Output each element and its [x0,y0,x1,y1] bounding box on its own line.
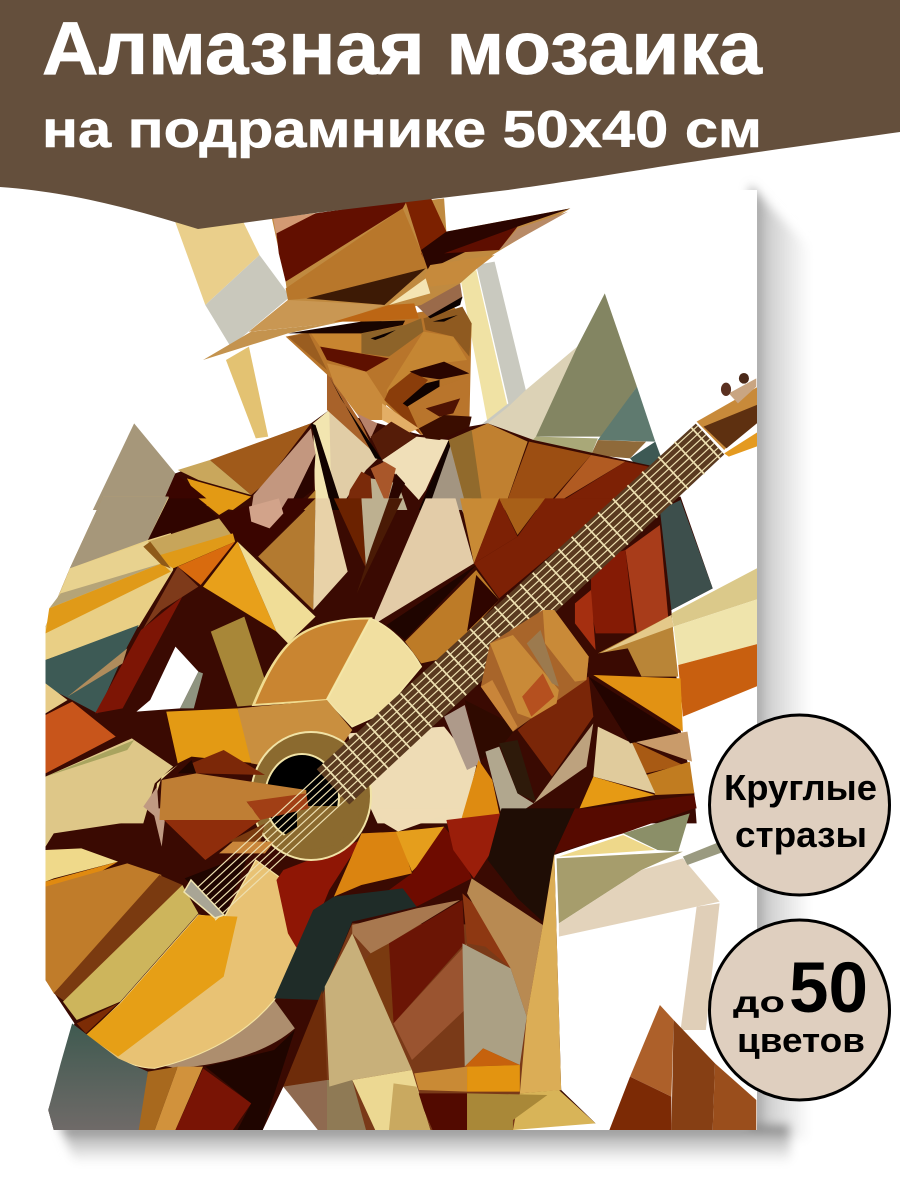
shirt and jacket upper [159,410,683,510]
badge: up to 50 colours: до [733,986,785,1019]
hat [203,197,570,360]
canvas shadow [60,185,810,1163]
right background shapes and lower corner triangle [557,813,756,1130]
badge: round rhinestones: Круглые [724,767,877,808]
guitar upper body [166,618,421,767]
painting: guitarist [45,190,761,1130]
badge: up to 50 colours [710,920,890,1100]
right hand fingers [481,610,589,732]
left hand [143,750,309,860]
torso, arms and left background stripes [46,497,760,823]
badge: up to 50 colours: 50 [789,949,868,1028]
guitar bridge [184,880,224,918]
lower guitar body and legs [46,808,694,1130]
title line 1: Алмазная мозаика [42,6,763,90]
face [286,283,472,460]
soundhole rosette [251,732,371,860]
badge: round rhinestones: стразы [735,814,867,855]
headstock [697,373,761,457]
title line 2: на подрамнике 50х40 см [42,101,762,159]
guitar neck with frets and strings [187,421,726,925]
figure silhouette base [46,497,713,1130]
background shapes and hat area [93,210,681,510]
badge: round rhinestones [710,715,890,895]
title banner [0,0,900,229]
badge: up to 50 colours: цветов [737,1022,865,1060]
